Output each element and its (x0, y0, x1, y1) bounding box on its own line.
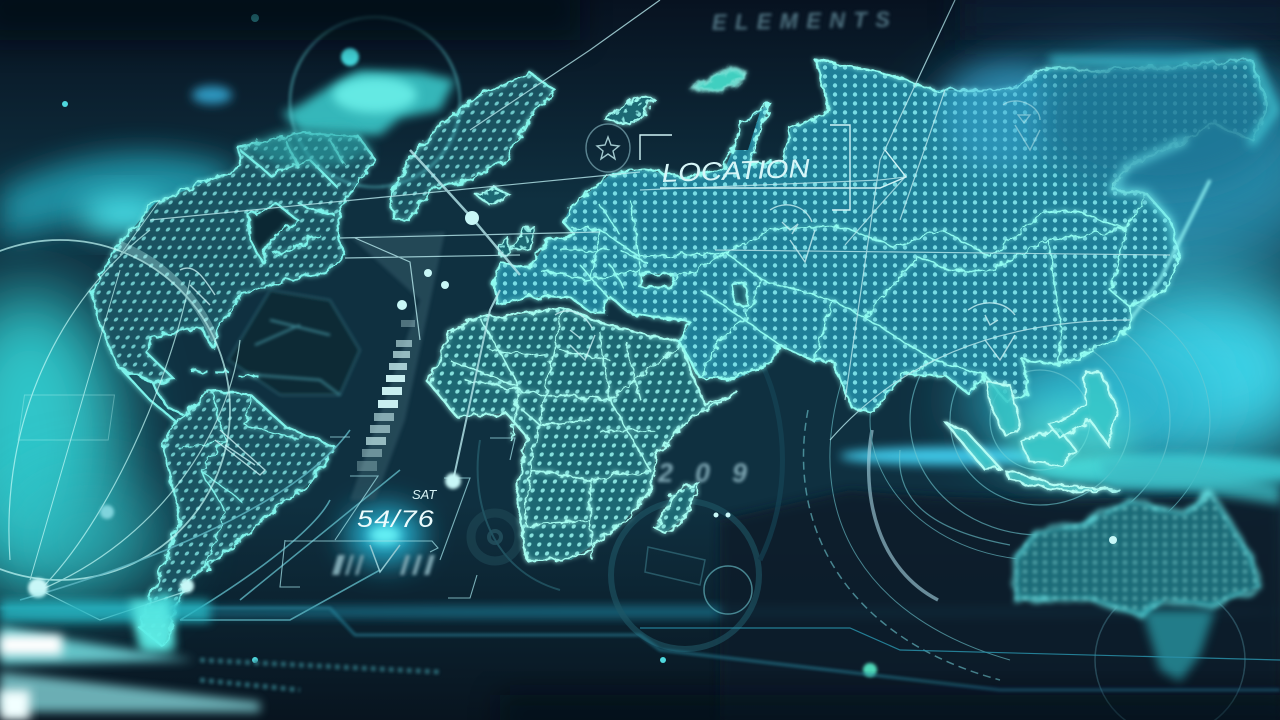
nodes and particles (28, 14, 1117, 677)
bottom left light streaks (0, 600, 260, 720)
number readout: 209 (657, 458, 769, 488)
islands: southeast asia (946, 370, 1135, 492)
sat readout (280, 437, 515, 598)
sat readout: SAT (412, 487, 437, 502)
continent: north america (92, 133, 375, 425)
top left bright cloud (237, 17, 460, 187)
background glow clouds (0, 50, 1280, 618)
lower circuit frame lines (0, 608, 1280, 690)
location markers (180, 101, 1040, 475)
hud hexagon and grey bar panel (228, 232, 445, 500)
continent: australia (1015, 493, 1260, 617)
continent: eurasia (494, 60, 1268, 412)
hud background circles (471, 280, 1245, 720)
continent: south america (139, 390, 335, 647)
elements label: ELEMENTS (712, 7, 890, 35)
island: madagascar (655, 482, 698, 533)
left globe arcs (0, 200, 240, 620)
hud connector lines (20, 0, 1170, 620)
sat readout: 54/76 (357, 506, 435, 533)
continent: africa (429, 307, 738, 560)
continent: greenland (392, 73, 555, 220)
blue blur over far east asia (940, 50, 1280, 320)
progress bar stack (357, 320, 415, 471)
australia blurred tail (1142, 610, 1215, 682)
location label (640, 125, 906, 210)
islands band: blurred new guinea (1100, 460, 1280, 505)
south america blurred tail (135, 590, 175, 650)
dark lower right sea (720, 490, 1280, 720)
islands: uk, ireland, iceland, svalbard (477, 68, 748, 255)
location label: LOCATION (661, 153, 810, 188)
